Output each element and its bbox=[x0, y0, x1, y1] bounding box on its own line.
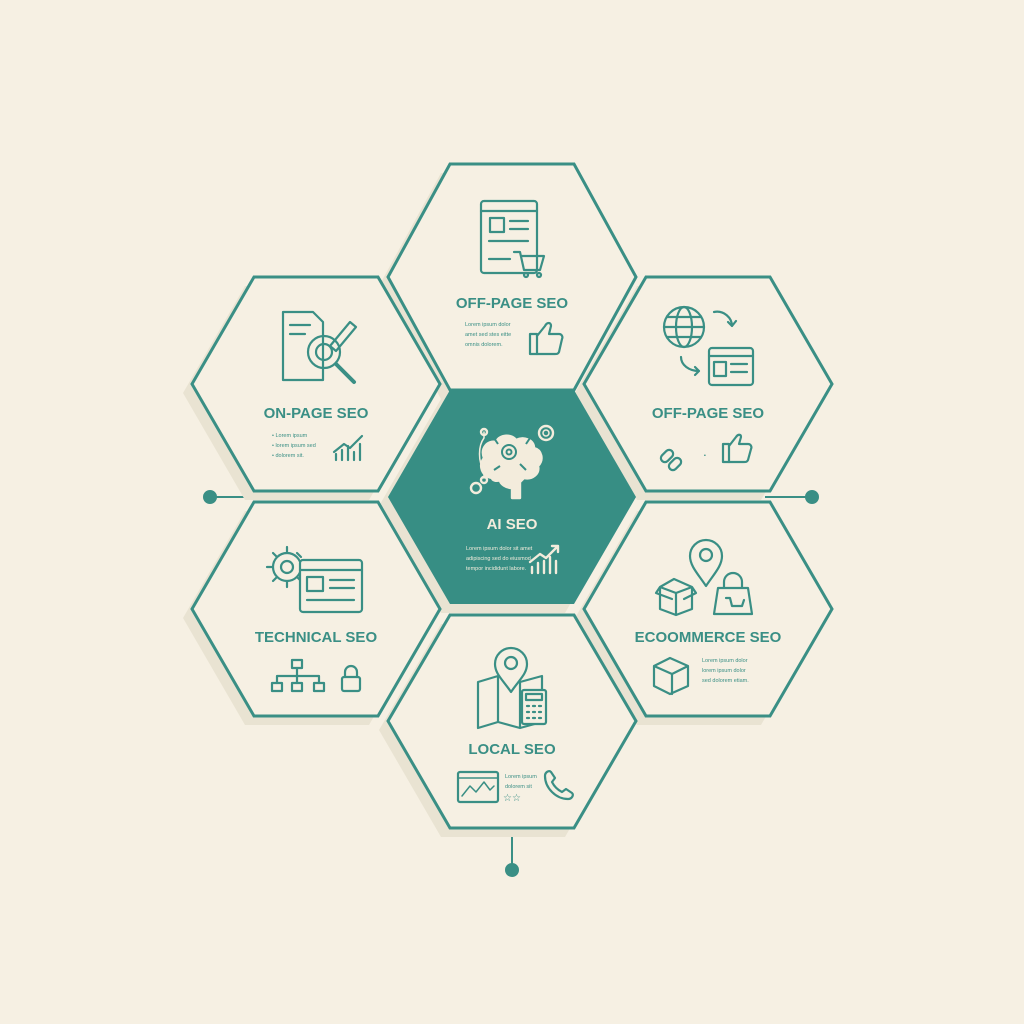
hex: ecommerce seo: ECOOMMERCE SEO bbox=[635, 629, 782, 646]
hex: ecommerce seo: lorem ipsum dolor bbox=[702, 668, 746, 674]
hex: on-page seo: ON-PAGE SEO bbox=[264, 405, 369, 422]
hex: technical seo bbox=[192, 502, 440, 716]
shadows bbox=[183, 173, 823, 837]
hex: AI SEO center: adipiscing sed do eiusmod bbox=[466, 556, 531, 562]
hex: local seo: LOCAL SEO bbox=[468, 741, 556, 758]
hex: top off-page seo: omnis dolorem. bbox=[465, 342, 503, 348]
hex: on-page seo: • lorem ipsum sed bbox=[272, 443, 316, 449]
hex: ecommerce seo: Lorem ipsum dolor bbox=[702, 658, 748, 664]
hex: AI SEO center: tempor incididunt labore. bbox=[466, 566, 527, 572]
hex: ecommerce seo: sed dolorem etiam. bbox=[702, 678, 749, 684]
hex: local seo: dolorem sit bbox=[505, 784, 532, 790]
hex: on-page seo bbox=[192, 277, 440, 491]
hex: local seo: Lorem ipsum bbox=[505, 774, 537, 780]
hex: local seo: ☆☆ bbox=[503, 793, 521, 804]
hex: technical seo: TECHNICAL SEO bbox=[255, 629, 377, 646]
hex: ecommerce seo bbox=[584, 502, 832, 716]
hex: AI SEO center: Lorem ipsum dolor sit amet bbox=[466, 546, 533, 552]
hex: AI SEO center bbox=[388, 390, 636, 604]
hex: AI SEO center: AI SEO bbox=[487, 516, 538, 533]
connectors bbox=[204, 491, 818, 876]
hex: top off-page seo bbox=[388, 164, 636, 390]
hex: local seo bbox=[388, 615, 636, 828]
hex: off-page seo right: ▪ bbox=[704, 453, 706, 459]
hex: off-page seo right bbox=[584, 277, 832, 491]
hex: on-page seo: • dolorem sit. bbox=[272, 453, 304, 459]
hex: off-page seo right: OFF-PAGE SEO bbox=[652, 405, 764, 422]
hex: top off-page seo: Lorem ipsum dolor bbox=[465, 322, 511, 328]
hex: top off-page seo: OFF-PAGE SEO bbox=[456, 295, 568, 312]
hex: top off-page seo: amet sed stes eitte bbox=[465, 332, 511, 338]
hex: on-page seo: • Lorem ipsum bbox=[272, 433, 308, 439]
